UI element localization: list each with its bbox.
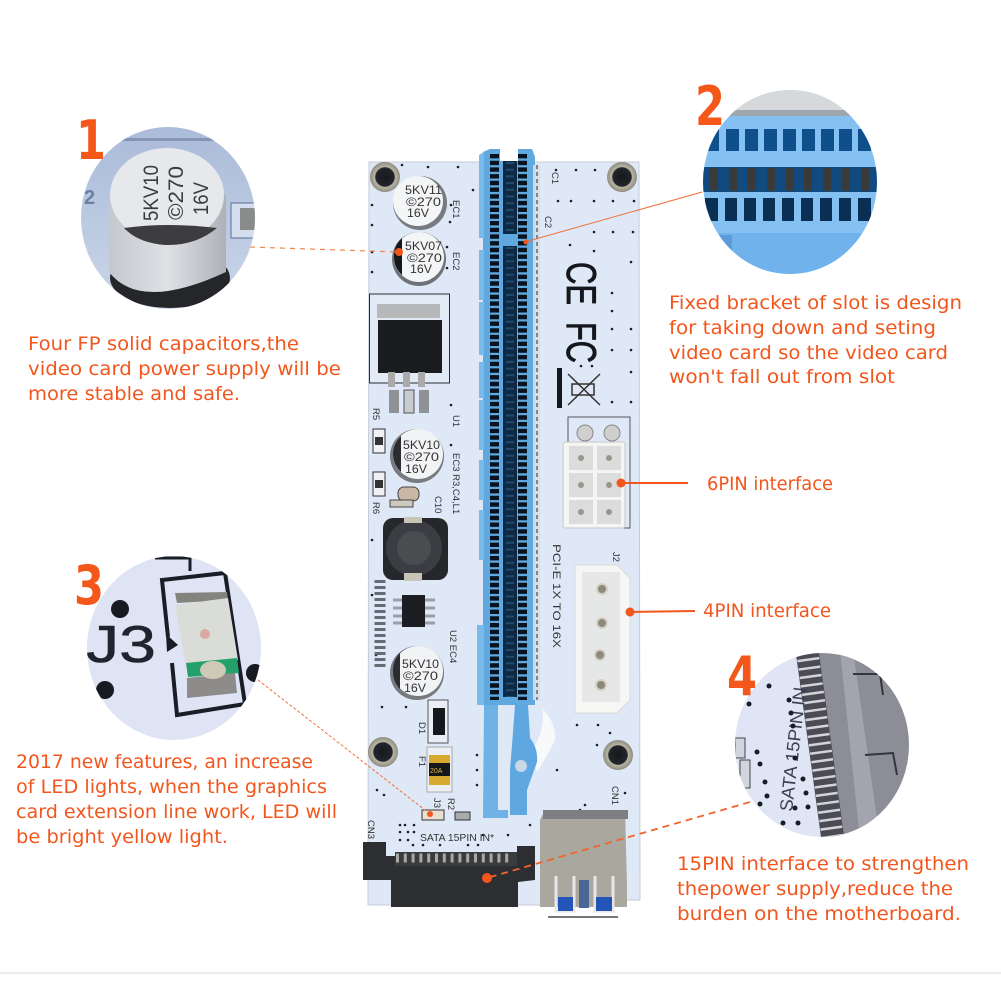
capacitor EC1: ©270 — [406, 195, 441, 209]
capacitor EC4: 16V — [404, 681, 426, 695]
window rows — [490, 154, 499, 700]
board via dots — [371, 164, 635, 846]
certification marks — [557, 262, 605, 408]
board silk labels: J2 — [610, 552, 621, 562]
cap markings: ©270 — [165, 166, 188, 220]
capacitor EC3 — [390, 429, 444, 483]
board silk labels: EC2 — [450, 252, 461, 270]
USB 3.0 port — [540, 810, 628, 918]
latch rail — [483, 705, 508, 818]
caption 3: card extension line work, LED will — [16, 801, 337, 823]
caption 4: burden on the motherboard. — [677, 903, 961, 925]
centre channel band — [700, 167, 880, 192]
board substrate — [368, 162, 640, 905]
capacitor EC2: 5KV07 — [405, 239, 442, 253]
silk J3: J3 — [86, 616, 156, 674]
capacitor EC1: 16V — [407, 206, 429, 220]
LED J3 and R2 — [422, 810, 470, 820]
silk outline — [162, 573, 245, 715]
cap top — [110, 148, 224, 228]
riser board — [363, 149, 640, 918]
board silk labels: F1 — [416, 756, 427, 767]
caption 1 — [28, 333, 341, 405]
caption 3: of LED lights, when the graphics — [16, 776, 327, 798]
leader line 1 — [250, 247, 403, 256]
connector shell — [808, 650, 915, 840]
LED body — [175, 598, 238, 665]
board silk labels: R6 — [370, 502, 381, 514]
silk text SATA 15PIN IN: SATA 15PIN IN* — [420, 832, 494, 844]
caption 2: won't fall out from slot — [669, 366, 895, 388]
bottom divider — [0, 972, 1001, 974]
contact coil — [807, 650, 833, 840]
diode D1 — [428, 700, 448, 743]
vias — [746, 684, 810, 826]
4-pin connector — [575, 565, 630, 713]
label 6PIN: 6PIN interface — [707, 473, 833, 495]
LED lower metal — [187, 673, 237, 698]
small pad — [735, 738, 750, 788]
fuse F1 — [427, 747, 452, 792]
cap body — [109, 195, 226, 292]
cap markings — [144, 166, 208, 220]
MOSFET U1 — [370, 294, 450, 413]
leader line 3 — [258, 680, 433, 817]
capacitor EC4: 5KV10 — [402, 657, 439, 671]
silk SATA 15PIN IN: SATA 15PIN IN — [776, 686, 810, 812]
caption 1: more stable and safe. — [28, 383, 240, 405]
housing lower face — [718, 233, 862, 274]
leader line 4 — [482, 802, 750, 883]
number 2: 2 — [695, 75, 725, 138]
capacitor EC2: 16V — [410, 262, 432, 276]
caption 2: for taking down and seting — [669, 317, 936, 339]
board silk labels: U1 — [450, 415, 461, 427]
zoom circle 1: capacitor — [80, 125, 260, 315]
caption 3 — [16, 751, 337, 848]
6-pin connector — [563, 417, 630, 528]
capacitor EC4 — [390, 646, 444, 700]
capacitor EC2: ©270 — [407, 251, 442, 265]
cap markings: 16V — [190, 182, 213, 215]
silk text PCI-E: PCI-E 1X TO 16X — [550, 544, 562, 649]
zoom circle 2: slot close-up — [700, 88, 880, 278]
LED green band — [186, 658, 239, 677]
capacitor EC1 — [393, 176, 447, 230]
IC U2 — [380, 580, 435, 670]
latch blue lever — [510, 705, 537, 815]
zoom circle 1: capacitor: 2 — [84, 187, 95, 209]
board silk labels — [365, 172, 621, 839]
top contact windows — [703, 129, 871, 151]
leader line 6PIN — [616, 478, 688, 488]
caption 4: 15PIN interface to strengthen — [677, 853, 969, 875]
caption 2: Fixed bracket of slot is design — [669, 292, 962, 314]
board silk labels: R5 — [370, 408, 381, 420]
board silk labels: EC3 R3,C4,L1 — [450, 453, 461, 514]
small components R5 R6 C10 — [373, 429, 419, 507]
capacitor EC1: 5KV11 — [405, 183, 442, 197]
board silk labels: CN3 — [365, 820, 376, 839]
caption 2: video card so the video card — [669, 342, 948, 364]
capacitor EC3: 16V — [405, 462, 427, 476]
number 1: 1 — [76, 109, 106, 172]
board silk labels: EC1 — [450, 200, 461, 218]
caption 4: thepower supply,reduce the — [677, 878, 953, 900]
capacitor EC4: ©270 — [403, 669, 438, 683]
board silk labels: C10 — [432, 496, 443, 513]
slot housing — [483, 149, 535, 705]
mounting holes — [368, 162, 637, 770]
board silk labels: D1 — [416, 722, 427, 734]
SATA 15-pin connector — [363, 842, 535, 907]
component pad — [231, 203, 256, 238]
board silk labels: U2 EC4 — [447, 630, 458, 663]
number 3: 3 — [74, 554, 104, 617]
caption 3: be bright yellow light. — [16, 826, 228, 848]
bottom contact windows — [705, 198, 871, 221]
PCIe slot — [477, 149, 555, 818]
LED top metal — [175, 592, 228, 603]
board silk labels: CN1 — [609, 786, 620, 805]
number 4: 4 — [727, 645, 757, 708]
certification marks: FC — [558, 322, 605, 363]
zoom circle 4: SATA close-up — [730, 650, 915, 840]
leader line 2 — [524, 192, 702, 244]
caption 1: video card power supply will be — [28, 358, 341, 380]
fuse F1: 20A — [430, 768, 443, 775]
contact gold edge — [533, 165, 540, 700]
silk top stub — [155, 558, 190, 571]
board silk labels: R2 — [445, 798, 456, 810]
caption 1: Four FP solid capacitors,the — [28, 333, 299, 355]
latch white cam — [531, 708, 555, 772]
board silk labels: C2 — [542, 216, 553, 228]
label 4PIN: 4PIN interface — [703, 600, 831, 622]
cap markings: 5KV10 — [140, 165, 163, 221]
cap base — [110, 267, 230, 308]
capacitor EC2 — [392, 232, 446, 286]
zoom circle 3: LED close-up — [85, 555, 265, 745]
caption 4 — [677, 853, 969, 925]
caption 2 — [669, 292, 962, 388]
inductor — [383, 517, 448, 581]
caption 3: 2017 new features, an increase — [16, 751, 313, 773]
board silk labels: J3 — [431, 798, 442, 808]
capacitor EC3: 5KV10 — [403, 438, 440, 452]
centre channel — [503, 161, 517, 234]
board silk labels: C1 — [549, 172, 560, 184]
leader line 4PIN — [626, 608, 695, 616]
certification marks: CE — [558, 262, 605, 305]
capacitor EC3: ©270 — [404, 450, 439, 464]
